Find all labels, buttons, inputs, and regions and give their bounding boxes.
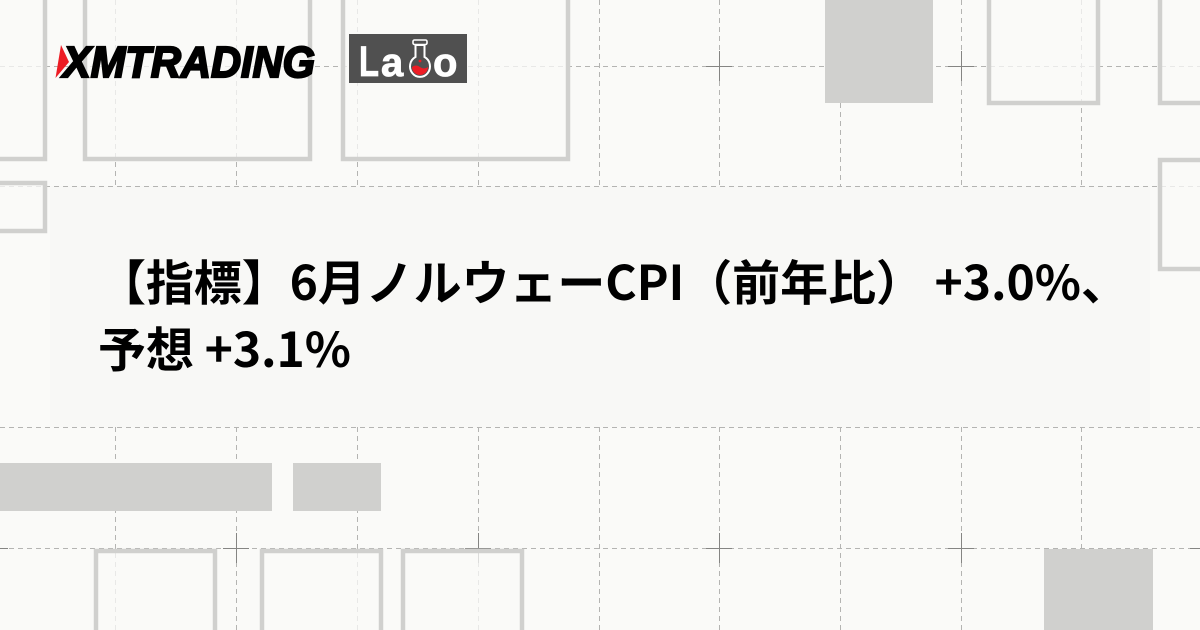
logo: Lab: a <box>381 41 404 84</box>
icon: red arrow <box>56 45 69 78</box>
logo background <box>349 34 467 83</box>
icon: flask <box>410 40 430 77</box>
title <box>98 244 1129 381</box>
title: 【指標】6月ノルウェーCPI（前年比） +3.0%、 <box>98 244 1129 314</box>
logo: Lab <box>349 34 467 84</box>
logo: Lab: o <box>433 41 457 84</box>
outlined candlesticks top <box>0 0 1200 269</box>
outlined candlesticks bottom <box>96 551 522 630</box>
logo: XMTRADING <box>56 38 315 86</box>
title: 予想 +3.1% <box>98 311 351 381</box>
title panel background <box>50 186 1150 427</box>
